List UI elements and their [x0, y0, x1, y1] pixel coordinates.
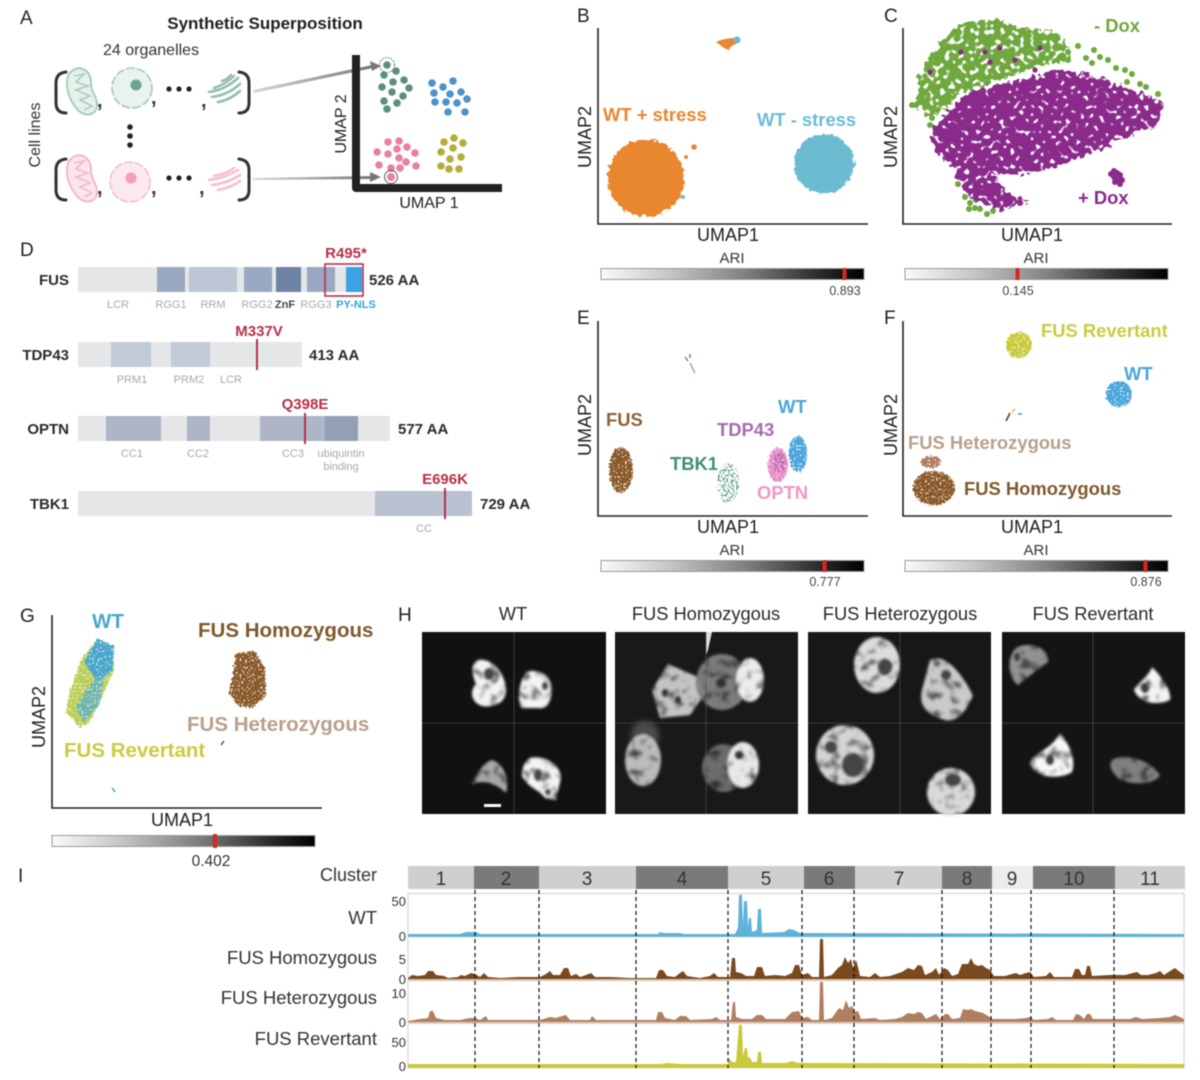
- teal cluster: [681, 36, 854, 199]
- TDP43 domain track: TDP43: [22, 347, 69, 364]
- label + Dox: + Dox: [1078, 187, 1129, 208]
- arrow: top row to UMAP point: [253, 61, 381, 93]
- cluster header band: 6: [824, 869, 834, 890]
- panel D: protein domain diagrams: [20, 240, 530, 535]
- top row organelles (green): ,: [151, 87, 157, 109]
- axis labels: [881, 394, 1063, 537]
- label Cluster: Cluster: [320, 865, 377, 885]
- cluster header band: 8: [962, 869, 972, 890]
- ARI colorbar 0.402: 0.402: [192, 853, 230, 870]
- image grid lines: [422, 632, 1185, 814]
- cluster header band: 3: [582, 869, 592, 890]
- OPTN domain track: 577 AA: [398, 421, 448, 438]
- ARI colorbar 0.145: ARI: [1023, 250, 1049, 267]
- TBK1 domain track: TBK1: [30, 496, 69, 513]
- ARI colorbar 0.893: ARI: [719, 250, 745, 267]
- FUS domain track: RRM: [200, 299, 226, 311]
- track: FUS Revertant: [255, 1025, 1184, 1074]
- pink schematic cluster: [373, 137, 420, 184]
- TBK1 cluster: [718, 463, 740, 503]
- label WT + stress: WT + stress: [603, 104, 707, 125]
- label TDP43: TDP43: [717, 419, 774, 440]
- ARI colorbar 0.876: [905, 542, 1168, 589]
- OPTN domain track: CC1: [121, 448, 143, 460]
- ARI colorbar 0.145: 0.145: [1002, 284, 1034, 298]
- axis labels: UMAP2: [29, 686, 49, 748]
- OPTN domain track: CC2: [187, 448, 209, 460]
- axis labels: UMAP1: [1001, 225, 1063, 245]
- bottom row organelles (pink): ,: [97, 177, 103, 199]
- track: FUS Revertant: 0: [399, 1059, 406, 1074]
- track: FUS Revertant: 50: [392, 1035, 406, 1050]
- label FUS Revertant: FUS Revertant: [64, 739, 205, 762]
- top row organelles (green): ,: [201, 90, 207, 112]
- FUS domain track: LCR: [107, 299, 129, 311]
- cluster header band: [408, 866, 1185, 890]
- FUS Homozygous cluster: [229, 651, 266, 708]
- arrow: bottom row to UMAP point: [253, 172, 381, 182]
- panel letter D: D: [20, 240, 34, 261]
- panel letter F: F: [884, 308, 896, 329]
- FUS domain track: RGG2: [241, 299, 273, 311]
- FUS Heterozygous cluster: [921, 456, 941, 468]
- title: Synthetic Superposition: Synthetic Superposition: [167, 14, 363, 33]
- track: FUS Heterozygous: 0: [399, 1015, 406, 1030]
- FUS domain track: RGG1: [155, 299, 187, 311]
- panel letter H: H: [398, 605, 412, 626]
- top row organelles (green): ,: [97, 90, 103, 112]
- green schematic cluster: [378, 58, 413, 113]
- axes: [52, 615, 322, 808]
- axes: [903, 321, 1172, 516]
- label - Dox: - Dox: [1094, 15, 1141, 36]
- FUS domain track: 526 AA: [369, 272, 419, 289]
- UMAP schematic axes: [356, 55, 502, 188]
- axis labels: UMAP1: [151, 810, 213, 830]
- WT cluster: [1106, 381, 1132, 407]
- OPTN domain track: CC3: [282, 448, 304, 460]
- track: FUS Homozygous: 5: [399, 952, 406, 967]
- track: FUS Heterozygous: 10: [392, 986, 406, 1001]
- axis labels: UMAP2: [575, 394, 595, 456]
- TBK1 domain track: CC: [416, 523, 432, 535]
- cluster header band: 2: [501, 869, 511, 890]
- axis labels: UMAP1: [697, 517, 759, 537]
- cluster header band: 9: [1007, 869, 1017, 890]
- cluster boundary dashed lines: [475, 890, 1114, 1068]
- column titles: FUS Revertant: [1033, 603, 1153, 624]
- axes: [598, 321, 868, 516]
- image: FUS Heterozygous: [808, 632, 991, 816]
- track: WT: [348, 894, 1184, 944]
- axis labels: UMAP1: [697, 225, 759, 245]
- panel I: cluster tracks: [18, 865, 1185, 1074]
- axis labels: UMAP2: [881, 394, 901, 456]
- OPTN domain track: ubiquintin: [317, 448, 365, 460]
- bottom row organelles (pink): ,: [151, 177, 157, 199]
- axis labels: [881, 106, 1063, 245]
- axis labels: [29, 686, 213, 830]
- TDP43 domain track: M337V: [235, 323, 283, 340]
- cluster header band: 7: [894, 869, 904, 890]
- bottom row organelles (pink): ,: [199, 177, 205, 199]
- ARI colorbar 0.145: [905, 250, 1168, 298]
- track: FUS Homozygous: FUS Homozygous: [227, 947, 377, 968]
- panel letter B: B: [577, 6, 590, 27]
- TDP43 domain track: 413 AA: [309, 347, 359, 364]
- tiny clusters: [112, 741, 224, 792]
- TDP43 domain track: PRM2: [174, 374, 204, 386]
- track: WT: 50: [392, 894, 406, 909]
- FUS domain track: FUS: [39, 272, 69, 289]
- FUS domain track: [39, 245, 419, 311]
- column titles: FUS Homozygous: [632, 603, 780, 624]
- cluster header band: 10: [1063, 869, 1085, 890]
- TDP43 core: [774, 451, 786, 473]
- WT cluster: [789, 436, 807, 472]
- mixed WT / revertant cluster: [66, 638, 114, 728]
- TDP43 domain track: LCR: [220, 374, 242, 386]
- blue schematic cluster: [428, 77, 471, 116]
- panel letter A: A: [20, 8, 33, 29]
- axis labels: [575, 394, 759, 537]
- label FUS Homozygous: FUS Homozygous: [198, 619, 373, 642]
- track: FUS Homozygous: [227, 939, 1184, 987]
- purple cluster: +Dox: [927, 45, 1162, 210]
- axis labels: UMAP1: [1001, 517, 1063, 537]
- top row organelles (green): [56, 68, 249, 115]
- panel letter E: E: [577, 308, 590, 329]
- axis labels: UMAP2: [575, 106, 595, 168]
- axis labels: [575, 106, 759, 245]
- label OPTN: OPTN: [757, 482, 808, 503]
- panel letter G: G: [20, 606, 35, 627]
- panel letter C: C: [884, 6, 898, 27]
- ARI colorbar 0.876: ARI: [1023, 542, 1049, 559]
- axes: [598, 28, 868, 224]
- FUS Revertant cluster: [1006, 332, 1032, 358]
- panel C: Dox UMAP: [881, 6, 1172, 298]
- axes: [903, 28, 1172, 224]
- cluster header band: 1: [436, 869, 446, 890]
- FUS domain track: PY-NLS: [336, 299, 376, 311]
- axis labels: UMAP2: [881, 106, 901, 168]
- TDP43 domain track: [22, 323, 359, 386]
- axis label UMAP 2: UMAP 2: [333, 94, 350, 154]
- column titles: [499, 603, 1153, 624]
- cluster header band: 11: [1140, 869, 1160, 890]
- label: 24 organelles: 24 organelles: [103, 42, 199, 59]
- track: FUS Homozygous: 0: [399, 972, 406, 987]
- label FUS Revertant: FUS Revertant: [1041, 320, 1168, 341]
- ARI colorbar 0.876: 0.876: [1130, 575, 1162, 589]
- track: FUS Heterozygous: FUS Heterozygous: [221, 987, 377, 1008]
- label FUS Homozygous: FUS Homozygous: [964, 478, 1121, 499]
- OPTN domain track: binding: [323, 461, 359, 473]
- FUS cluster: [609, 447, 633, 493]
- label WT: WT: [92, 610, 124, 633]
- TBK1 domain track: 729 AA: [480, 496, 530, 513]
- label: Cell lines: Cell lines: [27, 103, 44, 167]
- cluster header band: 5: [761, 869, 771, 890]
- TBK1 domain track: [30, 471, 530, 535]
- panel A: synthetic superposition schematic: [20, 8, 502, 212]
- tiny mixed cluster: [1006, 409, 1022, 421]
- axis label UMAP 1: UMAP 1: [399, 195, 459, 212]
- label FUS Heterozygous: FUS Heterozygous: [908, 432, 1072, 453]
- image: WT: [422, 632, 606, 814]
- ARI colorbar 0.777: ARI: [719, 542, 745, 559]
- vertical ellipsis: [127, 124, 133, 148]
- yellow schematic cluster: [437, 134, 467, 173]
- track: WT: WT: [348, 907, 377, 928]
- label WT: WT: [1124, 363, 1153, 384]
- orange cluster: [608, 38, 736, 216]
- image: FUS Homozygous: [615, 632, 798, 814]
- TDP43 domain track: PRM1: [117, 374, 147, 386]
- track: FUS Revertant: FUS Revertant: [255, 1028, 377, 1049]
- image: FUS Revertant: [1002, 632, 1185, 814]
- ARI colorbar 0.777: [601, 542, 864, 589]
- FUS domain track: ZnF: [275, 299, 295, 311]
- label TBK1: TBK1: [670, 453, 718, 474]
- column titles: FUS Heterozygous: [823, 603, 977, 624]
- ARI colorbar 0.777: 0.777: [809, 575, 841, 589]
- OPTN domain track: OPTN: [27, 421, 69, 438]
- OPTN cluster: [768, 448, 788, 482]
- FUS domain track: RGG3: [300, 299, 332, 311]
- label WT - stress: WT - stress: [757, 109, 856, 130]
- ARI colorbar 0.402: [52, 834, 315, 870]
- bottom row organelles (pink): [56, 155, 249, 202]
- FUS domain track: R495*: [325, 245, 367, 262]
- column titles: WT: [499, 603, 527, 624]
- panel H: microscopy images: [398, 603, 1185, 816]
- panel E: ALS lines UMAP: [575, 308, 868, 589]
- tiny cluster: [685, 354, 695, 373]
- panel B: WT stress UMAP: [575, 6, 868, 298]
- track: FUS Heterozygous: [221, 982, 1184, 1030]
- panel G: UMAP with revertant: [20, 606, 373, 870]
- TBK1 domain track: E696K: [422, 471, 468, 488]
- ARI colorbar 0.893: 0.893: [829, 284, 861, 298]
- panel letter I: I: [18, 866, 23, 887]
- track frame: [408, 894, 1184, 1068]
- cluster header band: 4: [677, 869, 688, 890]
- panel F: FUS lines UMAP: [881, 308, 1172, 589]
- OPTN domain track: [27, 396, 448, 473]
- green cluster: -Dox: [909, 20, 1161, 217]
- label FUS Heterozygous: FUS Heterozygous: [187, 713, 369, 736]
- track: WT: 0: [399, 929, 406, 944]
- label WT: WT: [778, 396, 807, 417]
- FUS Homozygous cluster: [913, 471, 955, 505]
- label FUS: FUS: [606, 409, 643, 430]
- ARI colorbar 0.893: [601, 250, 864, 298]
- OPTN domain track: Q398E: [282, 396, 328, 413]
